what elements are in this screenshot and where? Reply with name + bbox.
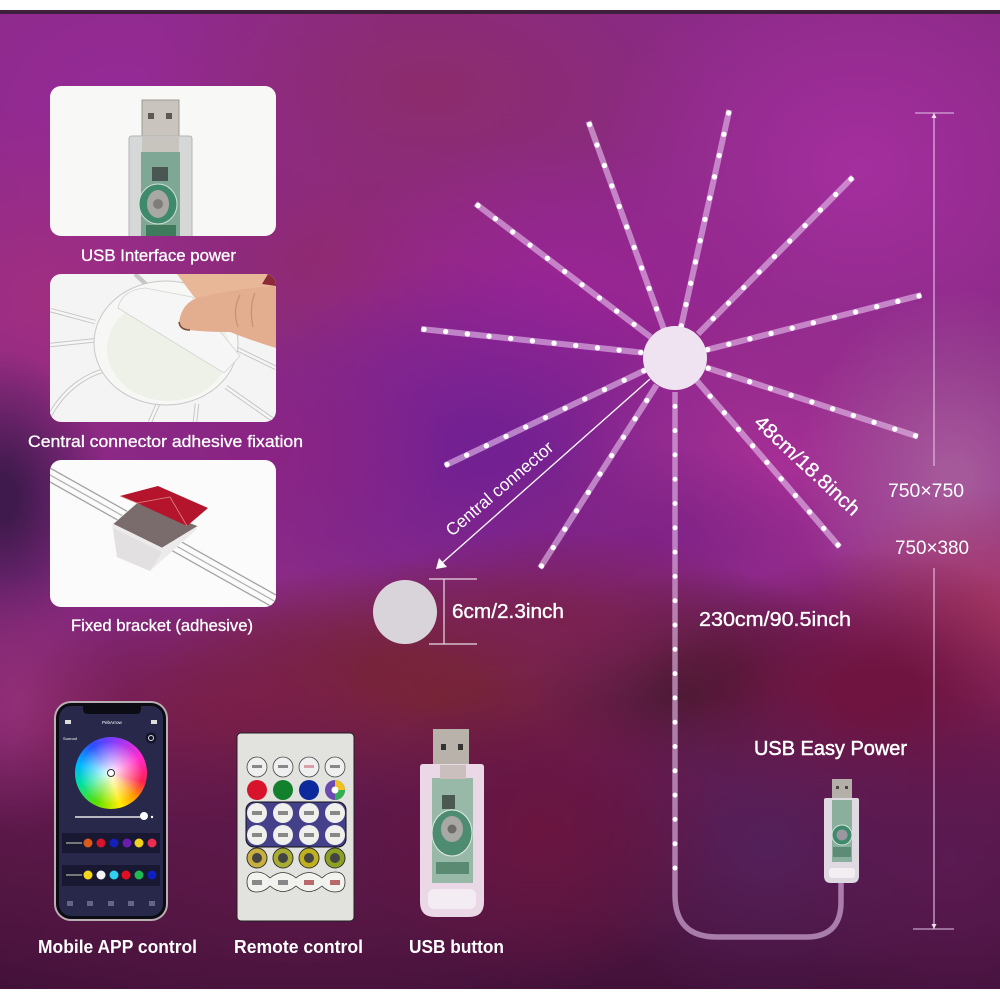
label: 6cm/2.3inch: 6cm/2.3inch <box>452 601 564 623</box>
colour row 2 <box>62 865 160 886</box>
phone: mobile app <box>54 701 168 921</box>
mode buttons <box>247 803 345 845</box>
brightness slider <box>75 812 153 820</box>
power cable <box>675 392 841 937</box>
LED dots <box>424 113 919 566</box>
small disc <box>373 580 437 644</box>
notch <box>83 706 141 714</box>
colour wheel <box>75 737 147 809</box>
central connector disc <box>643 326 707 390</box>
label: 230cm/90.5inch: 230cm/90.5inch <box>699 608 851 631</box>
housing end <box>428 889 476 909</box>
row 1 buttons <box>247 757 345 777</box>
icon: USB plug photo <box>129 100 192 239</box>
wave buttons <box>247 872 345 892</box>
LED dots on cable <box>672 400 678 868</box>
dimension: height upper <box>915 113 954 466</box>
wave button marks <box>252 880 340 885</box>
icon: USB easy power plug <box>824 779 859 883</box>
mode band <box>246 802 346 847</box>
circuit board <box>432 765 473 883</box>
icon: hand peeling adhesive from connector <box>50 274 276 422</box>
olive buttons <box>247 848 345 868</box>
spokes <box>421 110 922 568</box>
dimension bracket <box>429 579 477 644</box>
panel: fixed bracket <box>50 460 276 609</box>
label: USB Easy Power: USB Easy Power <box>754 737 907 760</box>
colour buttons <box>247 780 345 800</box>
app header <box>63 720 157 744</box>
panel: USB interface power <box>50 86 276 239</box>
bottom nav <box>67 901 155 906</box>
label: 750x380: 750×380 <box>895 538 969 559</box>
label: 750x750: 750×750 <box>888 481 964 502</box>
caption: Remote control: Remote control <box>234 937 363 957</box>
label: Central connector: Central connector <box>442 437 557 540</box>
top border band <box>0 10 1000 14</box>
USB button <box>420 729 484 917</box>
app header: Sunroof <box>63 736 78 741</box>
icon: adhesive bracket on cable <box>50 468 276 609</box>
central connector size <box>373 579 564 644</box>
caption: USB button: USB button <box>409 937 504 957</box>
panel: central connector adhesive fixation <box>50 274 276 422</box>
dimension: height lower <box>913 568 954 929</box>
caption: Fixed bracket (adhesive): Fixed bracket (adhesive) <box>71 617 253 635</box>
caption: Central connector adhesive fixation: Central connector adhesive fixation <box>28 432 303 451</box>
button marks <box>252 765 340 837</box>
arrow: central connector pointer <box>436 379 650 569</box>
app header: PebArrow <box>102 720 123 725</box>
housing <box>420 764 484 917</box>
remote control <box>237 733 354 921</box>
plug <box>433 729 469 767</box>
starburst light <box>421 110 922 937</box>
label: 48cm/18.8inch: 48cm/18.8inch <box>750 412 864 520</box>
caption: Mobile APP control: Mobile APP control <box>38 937 197 957</box>
caption: USB Interface power: USB Interface power <box>81 247 237 265</box>
colour row 1 <box>62 833 160 853</box>
